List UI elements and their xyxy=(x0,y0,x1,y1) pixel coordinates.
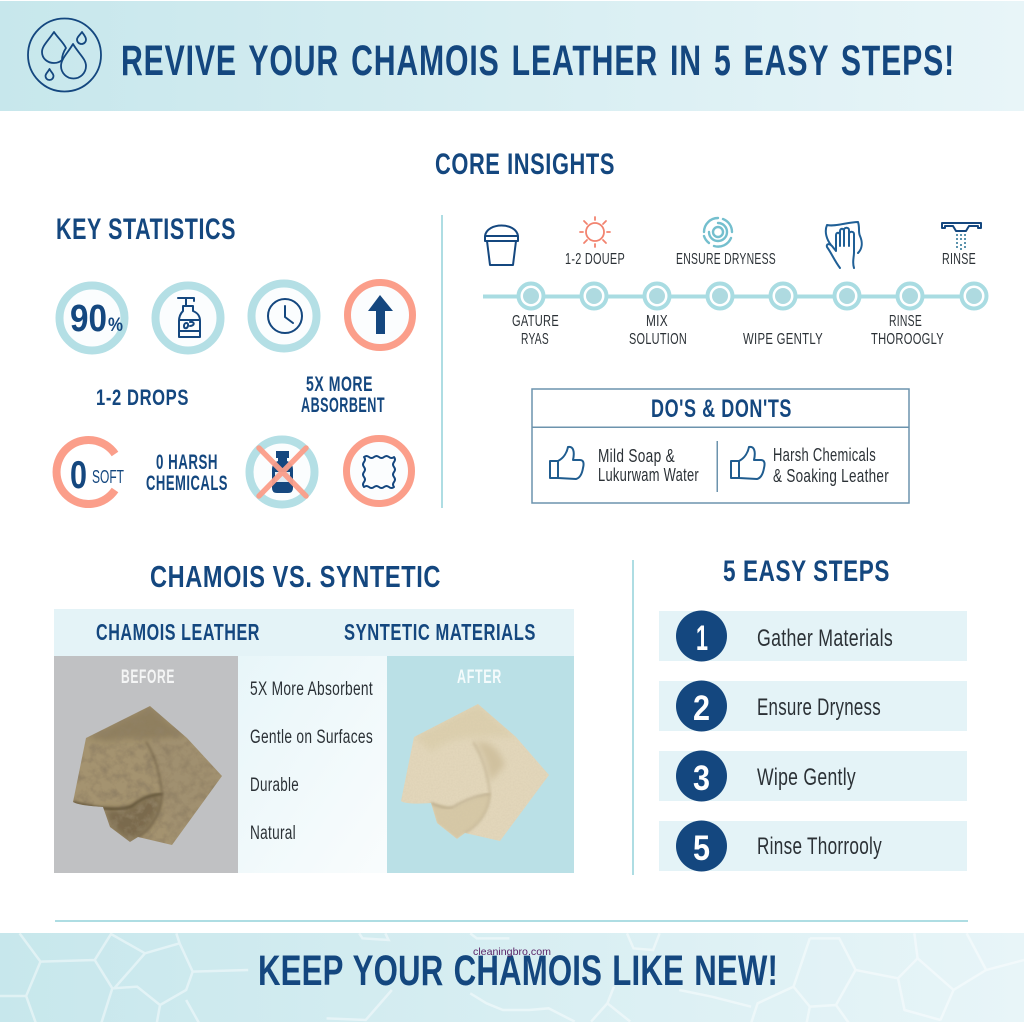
stat: clock icon xyxy=(252,284,316,348)
text: harsh chemicals xyxy=(773,445,889,486)
header banner xyxy=(0,1,1024,111)
step 5: 5 xyxy=(693,829,710,868)
watermark: cleaningbro.com: cleaningbro.com xyxy=(473,946,551,958)
stat: crossed out chemical bottle xyxy=(250,440,314,504)
middle column of benefits xyxy=(238,656,387,873)
before panel with dirty cloth xyxy=(54,656,238,873)
middle column of benefits: Natural xyxy=(250,823,296,844)
label: gature ryas xyxy=(512,313,559,348)
panel: step list xyxy=(659,610,967,872)
heading: do's and don'ts: DO'S & DON'TS xyxy=(651,395,792,423)
step 5: Rinse Thorrooly xyxy=(757,833,882,860)
text: harsh chemicals: Harsh Chemicals xyxy=(773,445,876,465)
text: mild soap: Lukurwam Water xyxy=(598,465,699,485)
label: rinse thoroogly xyxy=(871,313,944,348)
step 1 xyxy=(659,610,967,662)
footer message: KEEP YOUR CHAMOIS LIKE NEW! xyxy=(258,947,778,995)
label: gature ryas: RYAS xyxy=(521,331,549,348)
step 2: Ensure Dryness xyxy=(757,694,881,721)
step 2 xyxy=(659,680,967,732)
stat label: 0 harsh chemicals: 0 HARSH xyxy=(156,451,218,474)
text: mild soap xyxy=(598,446,699,485)
stat: 0 soft ring: SOFT xyxy=(92,467,124,487)
step 3 xyxy=(659,750,967,802)
stat: 90 percent: % xyxy=(108,315,123,336)
column heading: synthetic materials: SYNTETIC MATERIALS xyxy=(344,619,536,645)
step 3: 3 xyxy=(693,759,710,798)
panel: process timeline xyxy=(483,217,988,348)
icon: bucket xyxy=(485,226,518,265)
heading: key statistics: KEY STATISTICS xyxy=(56,213,236,246)
label: rinse thoroogly: THOROOGLY xyxy=(871,331,944,348)
stat label: 0 harsh chemicals xyxy=(146,451,228,495)
label: wipe gently: WIPE GENTLY xyxy=(743,331,823,348)
after panel with clean cloth: AFTER xyxy=(457,667,502,688)
text: mild soap: Mild Soap & xyxy=(598,446,675,466)
label: mix solution xyxy=(629,313,687,348)
label: mix solution: SOLUTION xyxy=(629,331,687,348)
stat label: 1-2 drops: 1-2 DROPS xyxy=(96,385,189,410)
label: ensure dryness: ENSURE DRYNESS xyxy=(676,251,776,268)
stat: up arrow icon xyxy=(348,282,412,348)
panel: key statistics xyxy=(56,213,412,504)
before panel with dirty cloth: BEFORE xyxy=(121,667,175,688)
icon: water drops in circle xyxy=(28,18,101,92)
label: rinse thoroogly: RINSE xyxy=(889,313,922,330)
text: harsh chemicals: & Soaking Leather xyxy=(773,466,889,486)
heading: core insights: CORE INSIGHTS xyxy=(435,148,615,181)
stat: soap bottle icon xyxy=(156,286,220,350)
middle column of benefits: Durable xyxy=(250,775,299,796)
step 5 xyxy=(659,820,967,872)
step 1: 1 xyxy=(696,619,708,658)
icon: sun xyxy=(580,217,610,247)
step 1: Gather Materials xyxy=(757,625,893,652)
stat: 90 percent xyxy=(60,286,124,350)
stat: soft cloth swatch xyxy=(346,438,412,504)
icon: thumbs up xyxy=(550,447,584,479)
panel: do's and don'ts xyxy=(532,389,909,503)
timeline track with nodes xyxy=(483,284,988,308)
image: clean cloth xyxy=(401,704,549,841)
label: rinse: RINSE xyxy=(942,251,976,268)
stat: 0 soft ring: 0 xyxy=(70,454,87,497)
image: dirty cloth xyxy=(73,706,222,845)
step 2: 2 xyxy=(693,689,710,728)
column heading: chamois leather: CHAMOIS LEATHER xyxy=(96,619,260,645)
step 3: Wipe Gently xyxy=(757,764,856,791)
icon: faucet rinse xyxy=(942,223,981,250)
after panel with clean cloth xyxy=(387,656,574,873)
heading: chamois vs synthetic: CHAMOIS VS. SYNTETIC xyxy=(150,559,441,594)
heading: 5 easy steps: 5 EASY STEPS xyxy=(723,555,890,588)
label: gature ryas: GATURE xyxy=(512,313,559,330)
stat label: 5x more absorbent: 5X MORE xyxy=(306,373,373,396)
middle column of benefits: Gentle on Surfaces xyxy=(250,727,373,748)
footer banner xyxy=(0,933,1024,1023)
stat: 90 percent: 90 xyxy=(70,298,107,340)
stat label: 5x more absorbent xyxy=(301,373,385,417)
middle column of benefits: 5X More Absorbent xyxy=(250,679,373,700)
label: mix solution: MIX xyxy=(646,313,668,330)
stat: 0 soft ring xyxy=(57,440,124,504)
panel: comparison table xyxy=(54,609,574,873)
icon: swirl xyxy=(704,218,732,247)
stat label: 0 harsh chemicals: CHEMICALS xyxy=(146,472,228,495)
label: 1-2 douep: 1-2 DOUEP xyxy=(565,251,625,268)
stat label: 5x more absorbent: ABSORBENT xyxy=(301,394,385,417)
icon: thumbs up xyxy=(731,447,765,479)
icon: hand wiping cloth xyxy=(826,222,862,268)
